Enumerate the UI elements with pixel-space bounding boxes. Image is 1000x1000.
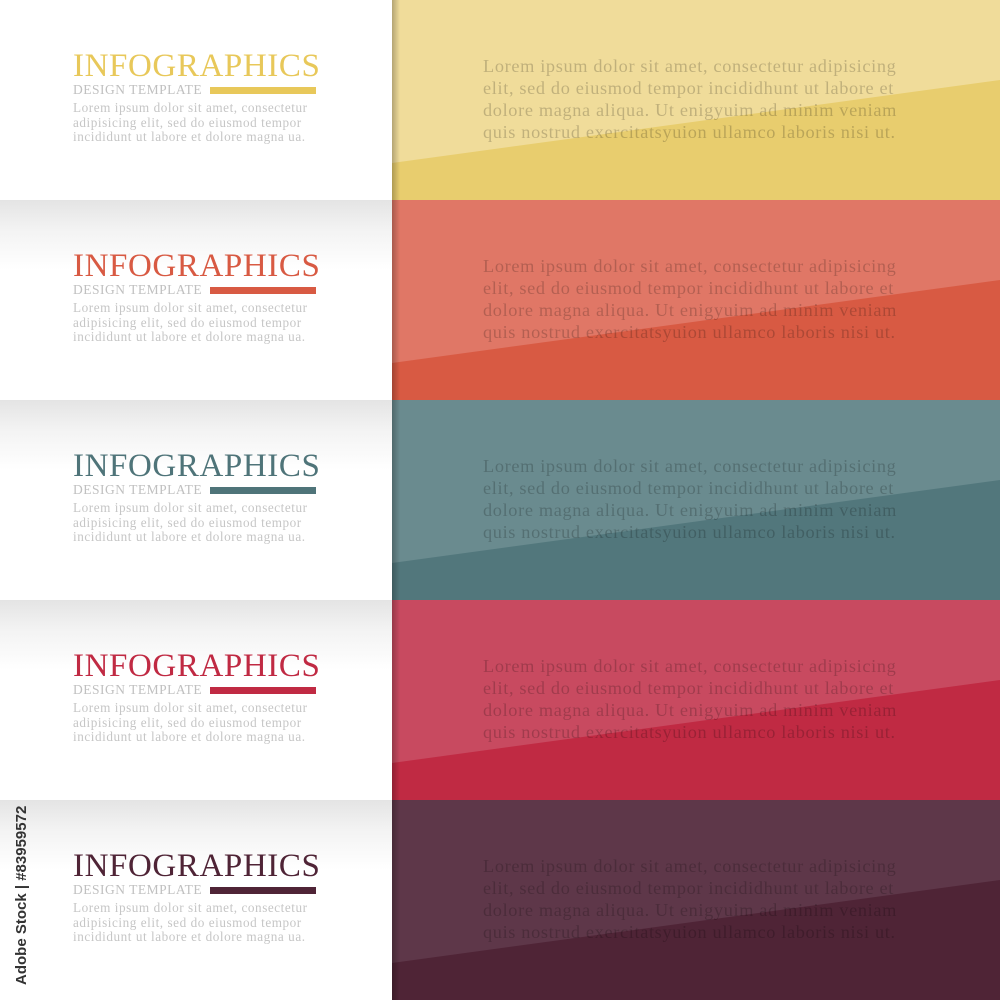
left panel 4 xyxy=(0,600,392,800)
right band 5 xyxy=(392,800,1000,1000)
body text 4: Lorem ipsum dolor sit amet, consectetur xyxy=(73,700,308,715)
body text 3: incididunt ut labore et dolore magna ua. xyxy=(73,529,306,544)
body text 5 xyxy=(73,900,308,944)
right band 1 xyxy=(392,0,1000,200)
body text 3: adipisicing elit, sed do eiusmod tempor xyxy=(73,515,302,530)
band text 1: elit, sed do eiusmod tempor incididhunt ut labore et xyxy=(483,78,894,98)
band text 3: Lorem ipsum dolor sit amet, consectetur adipisicing xyxy=(483,456,896,476)
band text 2: Lorem ipsum dolor sit amet, consectetur adipisicing xyxy=(483,256,896,276)
body text 1 xyxy=(73,100,308,144)
left panel 3 xyxy=(0,400,392,600)
right band 3 xyxy=(392,400,1000,600)
band text 3: quis nostrud exercitatsyuion ullamco laboris nisi ut. xyxy=(483,522,896,542)
band text 5: Lorem ipsum dolor sit amet, consectetur adipisicing xyxy=(483,856,896,876)
body text 3: Lorem ipsum dolor sit amet, consectetur xyxy=(73,500,308,515)
bar 4 xyxy=(210,687,316,694)
subtitle 4: DESIGN TEMPLATE xyxy=(73,682,202,697)
body text 2: adipisicing elit, sed do eiusmod tempor xyxy=(73,315,302,330)
title 4: INFOGRAPHICS xyxy=(73,648,320,684)
row 5 plum xyxy=(0,800,1000,1000)
body text 1: adipisicing elit, sed do eiusmod tempor xyxy=(73,115,302,130)
body text 2: Lorem ipsum dolor sit amet, consectetur xyxy=(73,300,308,315)
band text 3: elit, sed do eiusmod tempor incididhunt ut labore et xyxy=(483,478,894,498)
title 1: INFOGRAPHICS xyxy=(73,48,320,84)
body text 5: Lorem ipsum dolor sit amet, consectetur xyxy=(73,900,308,915)
body text 2: incididunt ut labore et dolore magna ua. xyxy=(73,329,306,344)
band text 1: quis nostrud exercitatsyuion ullamco laboris nisi ut. xyxy=(483,122,896,142)
band text 3: dolore magna aliqua. Ut enigyuim ad minim veniam xyxy=(483,500,897,520)
row 4 crimson xyxy=(0,600,1000,800)
band text 5: quis nostrud exercitatsyuion ullamco laboris nisi ut. xyxy=(483,922,896,942)
title 3: INFOGRAPHICS xyxy=(73,448,320,484)
band text 4: quis nostrud exercitatsyuion ullamco laboris nisi ut. xyxy=(483,722,896,742)
bar 1 xyxy=(210,87,316,94)
subtitle 3: DESIGN TEMPLATE xyxy=(73,482,202,497)
body text 5: incididunt ut labore et dolore magna ua. xyxy=(73,929,306,944)
band text 2: dolore magna aliqua. Ut enigyuim ad minim veniam xyxy=(483,300,897,320)
bar 5 xyxy=(210,887,316,894)
body text 4 xyxy=(73,700,308,744)
bar 2 xyxy=(210,287,316,294)
band text 4: dolore magna aliqua. Ut enigyuim ad minim veniam xyxy=(483,700,897,720)
right band 4 xyxy=(392,600,1000,800)
title 2: INFOGRAPHICS xyxy=(73,248,320,284)
band text 2 xyxy=(483,256,897,342)
subtitle 5: DESIGN TEMPLATE xyxy=(73,882,202,897)
body text 1: Lorem ipsum dolor sit amet, consectetur xyxy=(73,100,308,115)
body text 4: adipisicing elit, sed do eiusmod tempor xyxy=(73,715,302,730)
subtitle 2: DESIGN TEMPLATE xyxy=(73,282,202,297)
band text 2: elit, sed do eiusmod tempor incididhunt ut labore et xyxy=(483,278,894,298)
body text 3 xyxy=(73,500,308,544)
band text 5: elit, sed do eiusmod tempor incididhunt ut labore et xyxy=(483,878,894,898)
bar 3 xyxy=(210,487,316,494)
body text 4: incididunt ut labore et dolore magna ua. xyxy=(73,729,306,744)
vertical stock id text: Adobe Stock | #83959572 xyxy=(13,806,30,985)
row 3 teal xyxy=(0,400,1000,600)
right band 2 xyxy=(392,200,1000,400)
band text 1 xyxy=(483,56,897,142)
row 1 yellow xyxy=(73,0,1000,200)
left panel 2 xyxy=(0,200,392,400)
band text 4 xyxy=(483,656,897,742)
row 2 red xyxy=(0,200,1000,400)
band text 3 xyxy=(483,456,897,542)
band text 4: Lorem ipsum dolor sit amet, consectetur adipisicing xyxy=(483,656,896,676)
band text 5 xyxy=(483,856,897,942)
body text 5: adipisicing elit, sed do eiusmod tempor xyxy=(73,915,302,930)
band text 2: quis nostrud exercitatsyuion ullamco laboris nisi ut. xyxy=(483,322,896,342)
left panel 5 xyxy=(0,800,392,1000)
body text 2 xyxy=(73,300,308,344)
band text 1: Lorem ipsum dolor sit amet, consectetur adipisicing xyxy=(483,56,896,76)
band text 4: elit, sed do eiusmod tempor incididhunt ut labore et xyxy=(483,678,894,698)
left panel 1 xyxy=(0,0,392,200)
body text 1: incididunt ut labore et dolore magna ua. xyxy=(73,129,306,144)
subtitle 1: DESIGN TEMPLATE xyxy=(73,82,202,97)
title 5: INFOGRAPHICS xyxy=(73,848,320,884)
band text 1: dolore magna aliqua. Ut enigyuim ad minim veniam xyxy=(483,100,897,120)
band text 5: dolore magna aliqua. Ut enigyuim ad minim veniam xyxy=(483,900,897,920)
